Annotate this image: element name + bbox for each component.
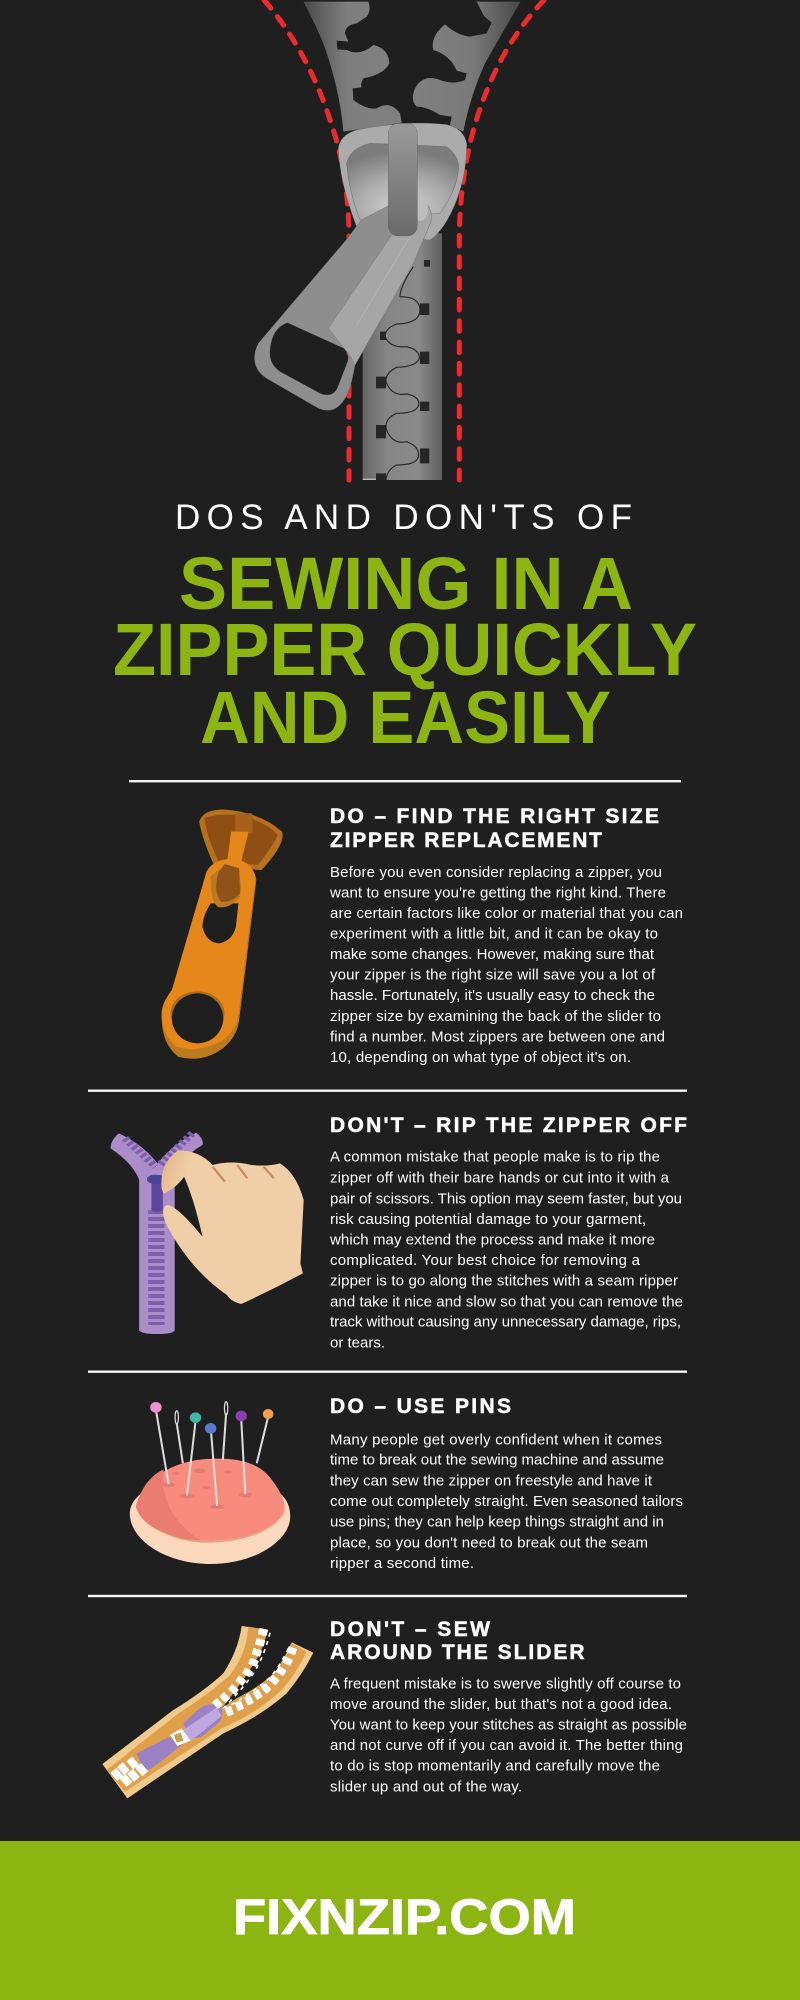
title main lines: SEWING IN A — [179, 542, 633, 625]
pins — [156, 1402, 268, 1506]
icon: hand pulling purple zipper — [111, 1133, 304, 1334]
body text: complicated. Your best choice for removing a — [330, 1252, 641, 1269]
red stitching right — [459, 0, 544, 480]
body text: and not curve off if you can avoid it. The better thing — [330, 1737, 683, 1754]
upper right zipper teeth — [413, 2, 521, 132]
body text: want to ensure you're getting the right kind. There — [329, 884, 666, 902]
body text — [330, 1675, 687, 1795]
body text — [330, 1431, 683, 1572]
body text: experiment with a little bit, and it can be okay to — [330, 926, 658, 942]
pin heads — [150, 1402, 162, 1413]
body text: zipper is to go along the stitches with a seam ripper — [330, 1273, 678, 1290]
heading — [330, 1618, 584, 1664]
heading — [330, 805, 659, 852]
heading: DO – USE PINS — [330, 1395, 511, 1418]
white stitches — [223, 1633, 288, 1708]
divider 4 — [88, 1595, 687, 1597]
zipper slider body — [338, 123, 467, 240]
section 1: find the right size — [162, 805, 683, 1066]
body text: slider up and out of the way. — [330, 1778, 522, 1795]
footer band — [0, 1841, 800, 2000]
upper left zipper teeth — [303, 2, 402, 132]
body text: and take it nice and slow so that you can remove the — [330, 1293, 683, 1310]
divider 2 — [88, 1090, 687, 1092]
cushion top — [136, 1459, 285, 1541]
body text: track without causing any unnecessary damage, rips, — [330, 1314, 681, 1331]
body text: A frequent mistake is to swerve slightly off course to — [330, 1675, 681, 1692]
heading: DON'T – SEW — [330, 1618, 490, 1641]
body text: zipper off with their bare hands or cut into it with a — [330, 1169, 670, 1186]
body text: 10, depending on what type of object it's on. — [330, 1049, 631, 1066]
body text: risk causing potential damage to your garment, — [330, 1211, 646, 1228]
body text: use pins; they can help keep things straight and in — [330, 1514, 664, 1531]
purple zipper — [111, 1133, 203, 1334]
body text: ripper a second time. — [330, 1555, 474, 1572]
body text: or tears. — [330, 1334, 385, 1351]
heading: DO – FIND THE RIGHT SIZE — [330, 805, 659, 828]
zipper slider inner — [347, 143, 459, 220]
section 3: use pins — [130, 1395, 683, 1572]
body text — [329, 864, 683, 1066]
heading: AROUND THE SLIDER — [330, 1641, 584, 1664]
icon: pin cushion — [130, 1402, 290, 1564]
title main lines: AND EASILY — [200, 676, 611, 759]
body text: zipper size by examining the back of the slider to — [330, 1008, 661, 1025]
body text: Many people get overly confident when it comes — [330, 1431, 662, 1448]
body text: You want to keep your stitches as straight as possible — [330, 1716, 687, 1733]
body text: pair of scissors. This option may seem faster, but you — [330, 1190, 682, 1207]
body text: your zipper is the right size will save you a lot of — [330, 966, 656, 984]
body text: make some changes. However, making sure that — [330, 946, 655, 963]
footer website text: FIXNZIP.COM — [233, 1889, 576, 1945]
cushion base — [130, 1493, 290, 1564]
body text: come out completely straight. Even seasoned tailors — [330, 1493, 683, 1510]
body text: to do is stop momentarily and carefully move the — [330, 1758, 660, 1775]
divider 1 — [129, 780, 681, 782]
icon: orange zipper pull — [162, 809, 283, 1059]
white teeth — [110, 1628, 297, 1787]
zipper pull tab — [255, 196, 431, 410]
slider — [137, 1704, 222, 1770]
section 2: rip the zipper off — [111, 1114, 687, 1351]
title main lines: ZIPPER QUICKLY — [113, 608, 697, 691]
body text: time to break out the sewing machine and assume — [330, 1452, 664, 1469]
zipper slider bridge — [388, 123, 417, 236]
red stitching left — [264, 0, 349, 480]
hand — [161, 1151, 304, 1304]
section 4: sew around the slider — [102, 1618, 687, 1798]
hero illustration: large zipper — [255, 0, 544, 480]
body text: Before you even consider replacing a zipper, you — [330, 864, 662, 881]
title intro line: DOS AND DON'TS OF — [175, 498, 632, 537]
body text: A common mistake that people make is to rip the — [330, 1149, 660, 1166]
body text: find a number. Most zippers are between one and — [330, 1028, 665, 1046]
icon: open zipper with slider — [102, 1626, 313, 1798]
body text: they can sew the zipper on freestyle and have it — [330, 1472, 653, 1489]
body text: place, so you don't need to break out the seam — [330, 1534, 648, 1551]
title main lines — [113, 542, 697, 759]
title — [113, 498, 697, 759]
pin holes — [162, 1468, 252, 1509]
body text: hassle. Fortunately, it's usually easy to check the — [330, 987, 655, 1004]
lower zipper teeth — [363, 233, 442, 480]
heading: DON'T – RIP THE ZIPPER OFF — [330, 1114, 687, 1137]
divider 3 — [88, 1370, 687, 1373]
heading: ZIPPER REPLACEMENT — [330, 829, 602, 852]
body text — [329, 1149, 683, 1351]
body text: which may extend the process and make it more — [329, 1232, 655, 1248]
tape — [102, 1626, 313, 1798]
body text: move around the slider, but that's not a good idea. — [330, 1696, 672, 1713]
body text: are certain factors like color or material that you can — [330, 905, 683, 922]
